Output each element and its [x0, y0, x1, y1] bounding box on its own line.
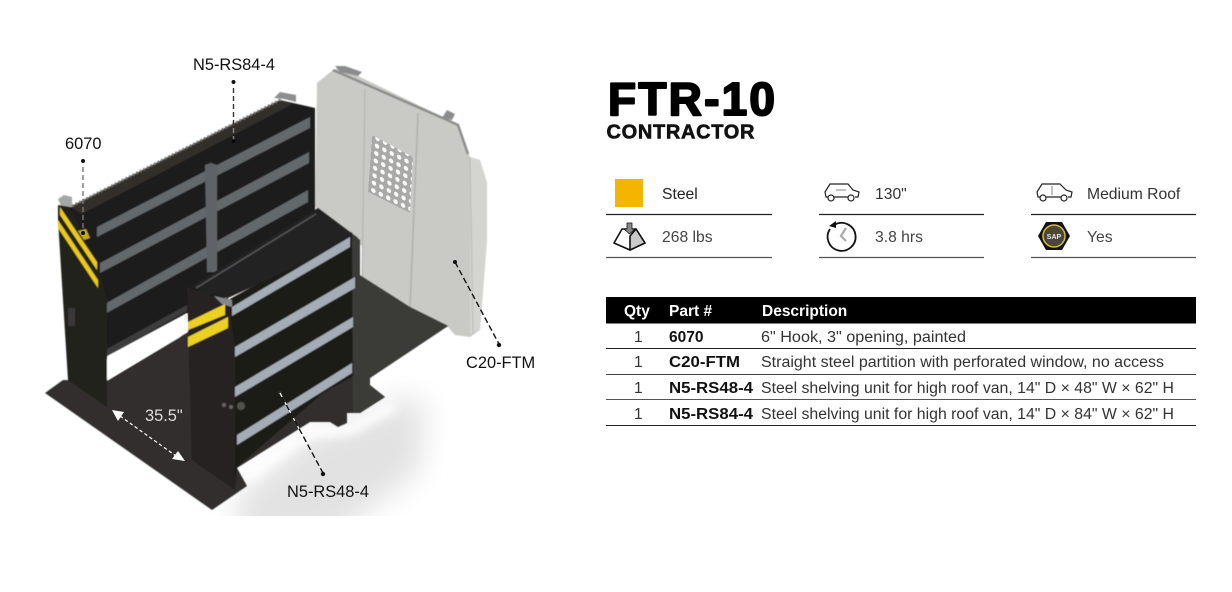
row: N5-RS48-4: N5-RS48-4 [669, 380, 753, 397]
row: N5-RS48-4: Steel shelving unit for high roof van, 14" D × 48" W × 62" H [761, 380, 1174, 397]
icon: SAP hex badge [1038, 222, 1070, 250]
callout: 6070: 6070 [65, 135, 101, 153]
callout: N5-RS84-4 [193, 56, 275, 143]
dimension: 35.5 inch aisle [112, 407, 185, 461]
row: N5-RS84-4: N5-RS84-4 [669, 406, 753, 423]
subtitle: CONTRACTOR [606, 122, 755, 144]
table header: Qty [624, 303, 650, 320]
row: N5-RS84-4: Steel shelving unit for high roof van, 14" D × 84" W × 62" H [761, 406, 1174, 423]
row: C20-FTM: C20-FTM [669, 354, 740, 371]
icon: roof height van [1037, 184, 1072, 201]
spec grid [606, 179, 1196, 258]
floor shadow [235, 400, 425, 540]
front unit end panel [187, 287, 235, 490]
illustration: van shelving package [45, 56, 535, 540]
parts table [606, 297, 1196, 426]
floor [45, 92, 448, 510]
title: FTR-10 [608, 73, 775, 125]
hook 6070 [78, 229, 90, 240]
perforated window [368, 136, 413, 213]
row: N5-RS84-4: 1 [634, 406, 643, 423]
back unit left end panel [58, 205, 107, 407]
icon: steel material swatch [615, 179, 643, 207]
back unit rails [97, 117, 310, 315]
front panel bolts [222, 403, 226, 407]
spec: material: Steel [662, 186, 698, 203]
spec: roof: Medium Roof [1087, 186, 1181, 203]
table header: Part # [669, 303, 712, 320]
row: 6070 [634, 329, 966, 346]
icon: install time clock [828, 221, 856, 251]
front shelving unit body [228, 232, 355, 490]
icon: wheelbase van [825, 184, 859, 201]
callout: N5-RS84-4: N5-RS84-4 [193, 56, 275, 74]
spec: weight: 268 lbs [662, 229, 713, 246]
back shelving unit [62, 100, 315, 357]
yellow stripes back [60, 207, 97, 270]
yellow stripes front [188, 304, 225, 330]
table header [606, 297, 1196, 324]
white gap under back unit [106, 327, 180, 380]
spec: wheelbase: 130" [875, 186, 907, 203]
row: 6070: 6" Hook, 3" opening, painted [761, 329, 966, 346]
row: 6070: 1 [634, 329, 643, 346]
table header: Description [762, 303, 847, 320]
partition panel [315, 66, 487, 337]
callout: C20-FTM: C20-FTM [466, 354, 535, 372]
row: N5-RS48-4: 1 [634, 380, 643, 397]
callout: C20-FTM [453, 260, 535, 372]
row: C20-FTM: 1 [634, 354, 643, 371]
dimension: 35.5 inch aisle: 35.5" [145, 407, 183, 425]
row: C20-FTM: Straight steel partition with perforated window, no access [761, 354, 1164, 371]
spec: SAP: Yes [1087, 229, 1113, 246]
row: 6070: 6070 [669, 329, 703, 346]
callout: 6070 [65, 135, 101, 235]
callout: N5-RS48-4: N5-RS48-4 [287, 483, 369, 501]
icon: weight [614, 223, 645, 250]
icon: SAP hex badge: SAP [1047, 234, 1062, 241]
spec: install time: 3.8 hrs [875, 229, 923, 246]
front unit rails [232, 237, 355, 445]
callout: N5-RS48-4 [278, 391, 369, 501]
